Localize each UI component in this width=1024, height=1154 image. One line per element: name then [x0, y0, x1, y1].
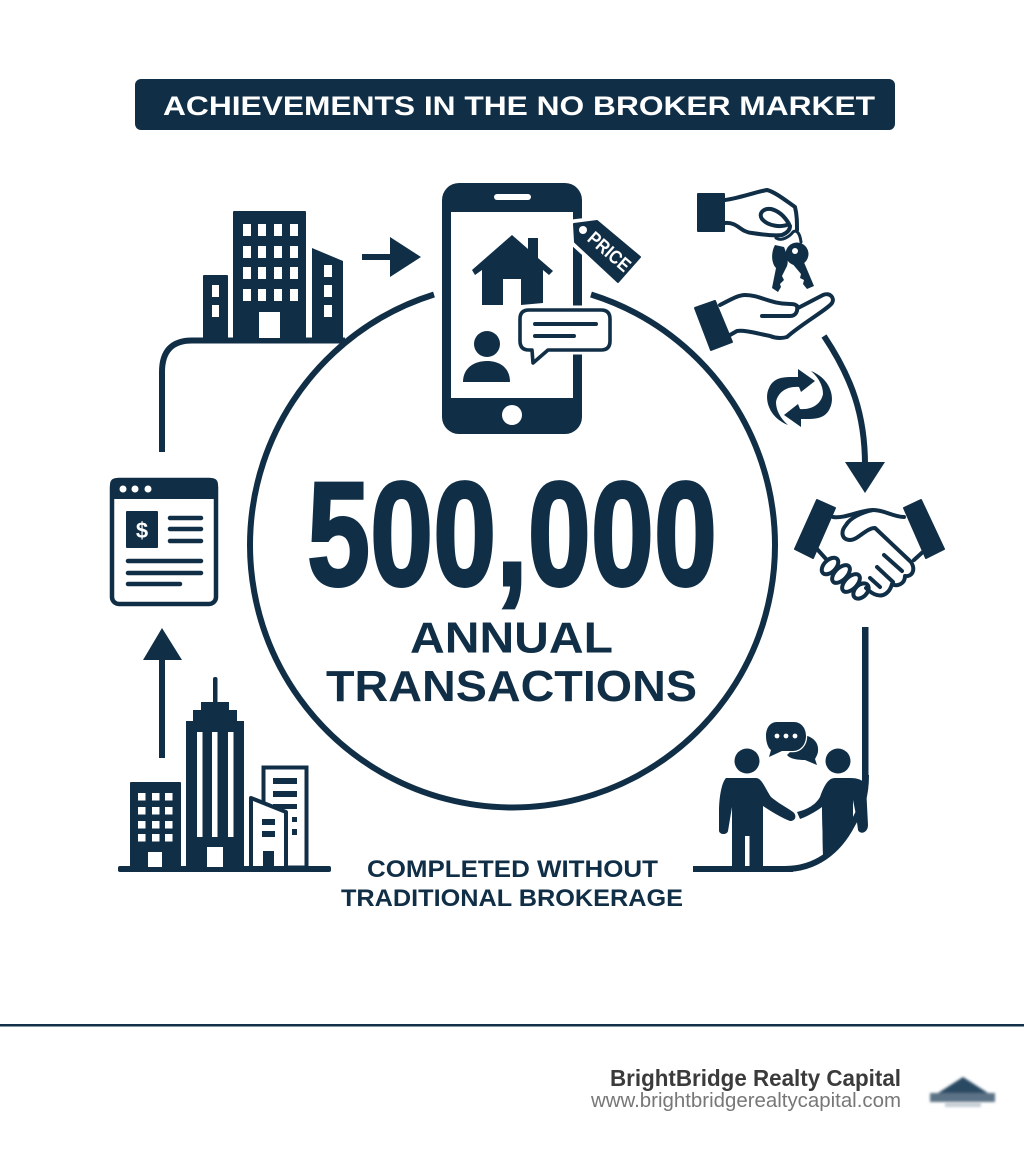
icon: listing page: $ [136, 518, 148, 543]
central circle outline [250, 294, 775, 807]
icon: refresh arrows [767, 369, 832, 427]
icon: price tag: PRICE [583, 228, 634, 277]
icon: chat bubble [520, 310, 610, 363]
icon: hand passing keys [697, 190, 814, 292]
right person [797, 748, 868, 856]
icon: handshake [795, 500, 944, 602]
icon: city skyline [118, 677, 331, 872]
annual label: ANNUAL [410, 614, 613, 662]
footer company name and URL [590, 1065, 901, 1112]
footer rule [0, 1024, 1024, 1026]
icon: person [463, 331, 510, 382]
central statistic [307, 452, 717, 711]
title banner [135, 79, 895, 130]
left person [719, 748, 795, 868]
icon: listing page [110, 478, 218, 604]
big number: 500,000 [307, 452, 717, 617]
ground curve [785, 775, 866, 869]
icon: office building top left with connector [162, 211, 345, 452]
caption [341, 856, 683, 912]
icon: two people shaking hands with connector [693, 627, 868, 872]
arrow: skyline to listing [143, 628, 182, 758]
icon: receiving hand [695, 294, 833, 350]
footer company name and URL: BrightBridge Realty Capital [610, 1065, 901, 1091]
footer company name and URL: www.brightbridgerealtycapital.com [590, 1090, 901, 1112]
footer logo [930, 1077, 995, 1107]
icon: keys [772, 242, 814, 292]
arrow: building to phone [362, 237, 421, 277]
transactions label: TRANSACTIONS [326, 662, 697, 711]
arrow: keys to handshake [824, 336, 885, 493]
title banner: ACHIEVEMENTS IN THE NO BROKER MARKET [163, 91, 876, 121]
icon: smartphone with listing [442, 183, 641, 434]
speech bubbles [766, 722, 818, 765]
caption: TRADITIONAL BROKERAGE [341, 885, 683, 912]
icon: house [472, 235, 553, 305]
caption: COMPLETED WITHOUT [367, 856, 658, 883]
